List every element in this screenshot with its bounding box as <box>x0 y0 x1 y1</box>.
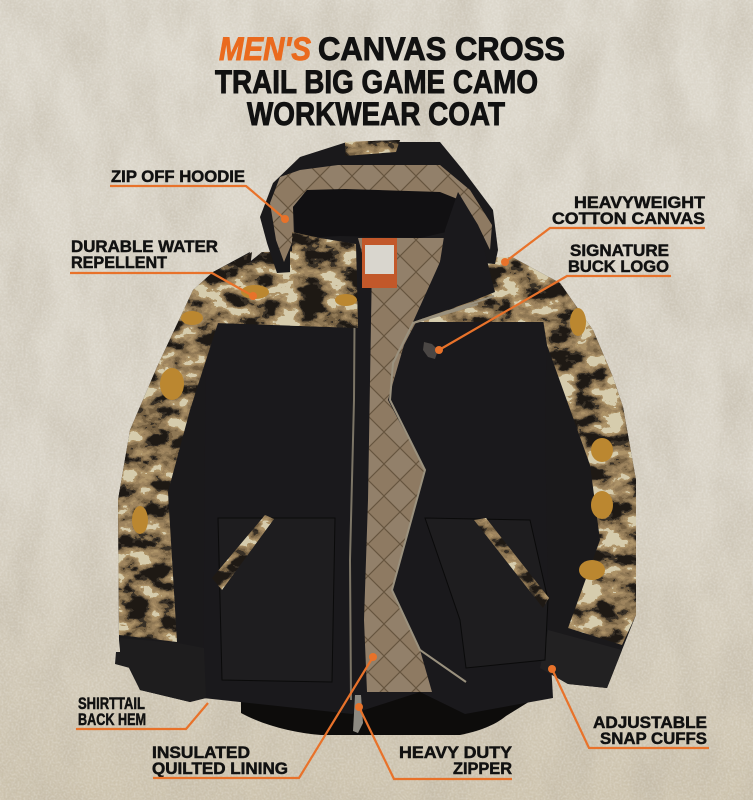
title <box>215 31 565 132</box>
right cuff <box>540 630 622 688</box>
callout: durable water repellent <box>70 238 257 300</box>
quilted lining <box>364 288 432 692</box>
title: CANVAS CROSS <box>318 31 565 67</box>
neck label <box>362 238 397 288</box>
zipper left <box>350 250 355 700</box>
right sleeve base <box>512 257 636 688</box>
buck logo <box>423 342 438 359</box>
callout: zip off hoodie <box>110 168 289 223</box>
collar left flap <box>290 230 360 330</box>
hood outer <box>260 142 498 273</box>
callout: heavy duty zipper <box>355 703 512 779</box>
callout: durable water repellent: DURABLE WATER <box>71 238 218 256</box>
zipper collar edge <box>413 296 494 323</box>
callout: insulated quilted lining: QUILTED LINING <box>152 760 288 778</box>
callout: heavyweight cotton canvas <box>501 194 705 266</box>
callout: insulated quilted lining: INSULATED <box>152 744 250 762</box>
title line 3: WORKWEAR COAT <box>247 96 505 132</box>
callout: signature buck logo: SIGNATURE <box>570 242 669 260</box>
callout: adjustable snap cuffs <box>548 665 709 748</box>
callout: shirttail back hem: SHIRTTAIL <box>78 695 145 713</box>
hood quilted lining <box>270 165 492 262</box>
title line 1: MEN'S <box>219 31 312 67</box>
camo leaves <box>132 285 613 580</box>
callout: signature buck logo <box>435 242 671 354</box>
callout: zip off hoodie: ZIP OFF HOODIE <box>111 168 245 186</box>
left pocket <box>218 518 335 682</box>
hood camo patch <box>345 140 401 156</box>
jacket lower back hem <box>240 680 540 735</box>
callout: shirttail back hem <box>76 695 208 729</box>
zipper pull <box>353 695 363 733</box>
inner lining strip behind collar <box>358 238 445 312</box>
callout: heavy duty zipper: HEAVY DUTY <box>399 744 512 762</box>
collar interior <box>293 189 460 238</box>
collar right flap <box>413 192 495 322</box>
left pocket camo trim <box>218 515 274 590</box>
callout: heavy duty zipper: ZIPPER <box>453 760 512 778</box>
right pocket camo trim <box>474 518 549 608</box>
callout: insulated quilted lining <box>152 653 377 778</box>
callout: adjustable snap cuffs: SNAP CUFFS <box>600 730 707 748</box>
jacket illustration <box>100 130 650 735</box>
title line 2: TRAIL BIG GAME CAMO <box>215 64 538 100</box>
right pocket <box>425 518 548 668</box>
callout: durable water repellent: REPELLENT <box>71 254 167 272</box>
callout: adjustable snap cuffs: ADJUSTABLE <box>593 714 707 732</box>
callout: heavyweight cotton canvas: HEAVYWEIGHT <box>574 194 705 212</box>
callout: shirttail back hem: BACK HEM <box>78 711 146 729</box>
left sleeve base <box>118 252 250 702</box>
zipper right <box>390 304 478 682</box>
jacket body <box>203 252 553 714</box>
camo panels: sleeves, yoke, collar, pocket trims <box>100 130 650 650</box>
left cuff <box>115 638 206 702</box>
callout: heavyweight cotton canvas: COTTON CANVAS <box>552 210 705 228</box>
callout: signature buck logo: BUCK LOGO <box>568 258 669 276</box>
